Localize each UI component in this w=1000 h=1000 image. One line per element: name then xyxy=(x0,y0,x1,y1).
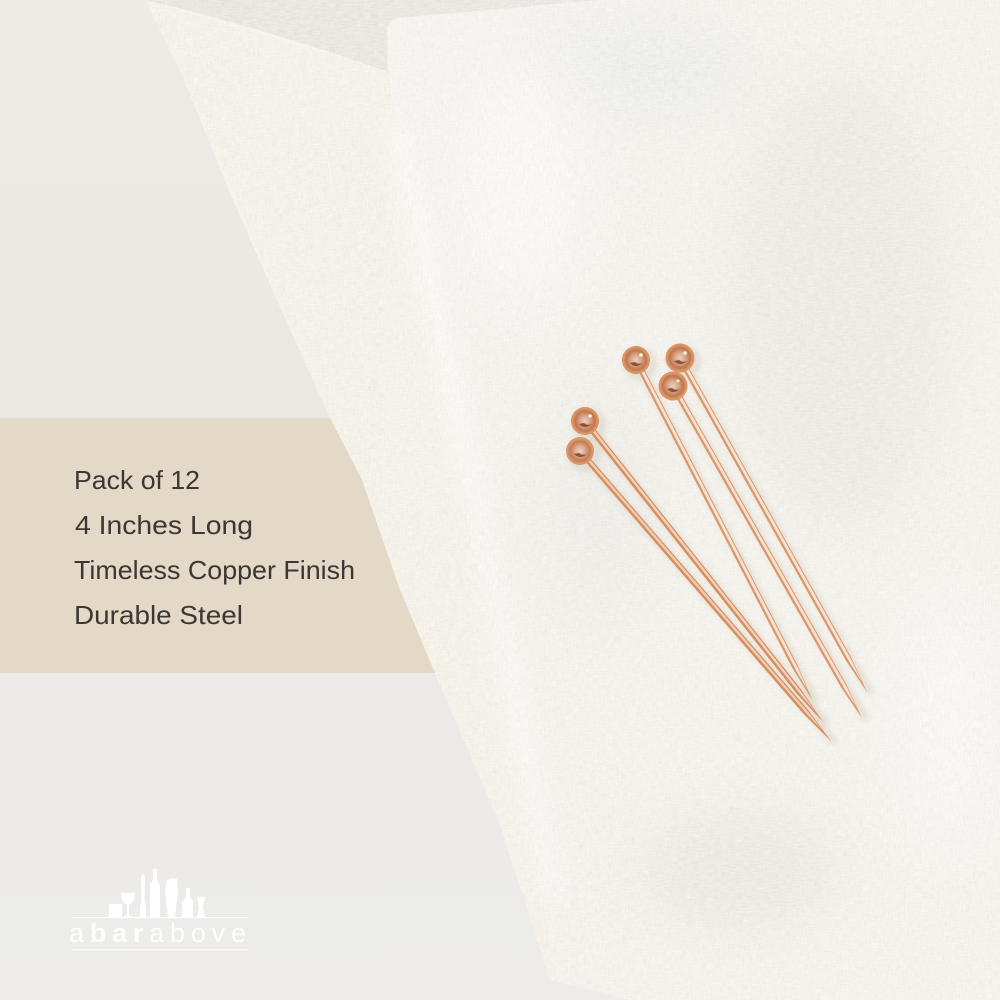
pick 5 xyxy=(584,457,834,743)
warm back flap tone xyxy=(146,2,247,98)
ball head 5 xyxy=(566,437,594,465)
ball head 2 xyxy=(658,372,688,400)
ball head 3 xyxy=(666,344,694,372)
beige feature panel xyxy=(0,418,435,673)
feature list text: Durable Steel xyxy=(74,600,243,630)
pick 1 xyxy=(638,367,815,701)
pick shadows xyxy=(571,349,871,743)
ball head 4 xyxy=(571,407,599,435)
feature list text: Pack of 12 xyxy=(74,465,200,495)
pick 2 xyxy=(675,393,865,719)
cloth soft shading xyxy=(520,20,760,120)
feature list text: Timeless Copper Finish xyxy=(74,555,355,585)
logo wordmark: abarabove xyxy=(69,918,246,948)
logo rules xyxy=(72,917,248,918)
pick 4 xyxy=(589,427,826,724)
feature list text xyxy=(74,465,355,630)
feature list text: 4 Inches Long xyxy=(75,510,253,540)
pick 3 xyxy=(682,365,870,694)
icon: bar bottles skyline xyxy=(109,869,205,917)
ball head 1 xyxy=(622,346,650,374)
grey plate behind cloth at top xyxy=(145,0,610,75)
logo: a bar above xyxy=(69,869,248,950)
copper cocktail picks xyxy=(566,344,871,743)
